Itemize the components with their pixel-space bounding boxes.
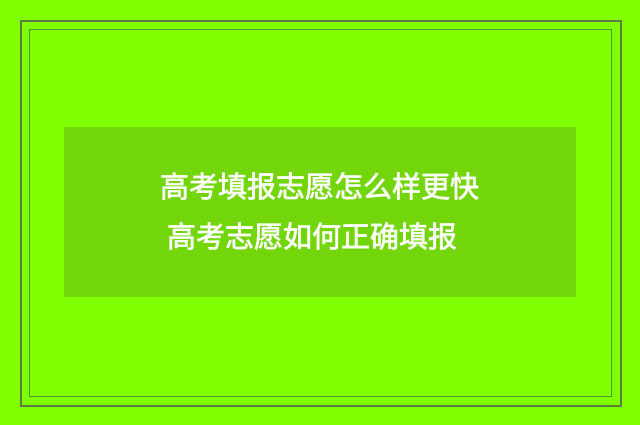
heading: line 2: 高考志愿如何正确填报 (167, 222, 457, 254)
inner frame border (29, 29, 612, 397)
panel: title background (64, 127, 576, 297)
heading: line 1: 高考填报志愿怎么样更快 (160, 172, 479, 204)
